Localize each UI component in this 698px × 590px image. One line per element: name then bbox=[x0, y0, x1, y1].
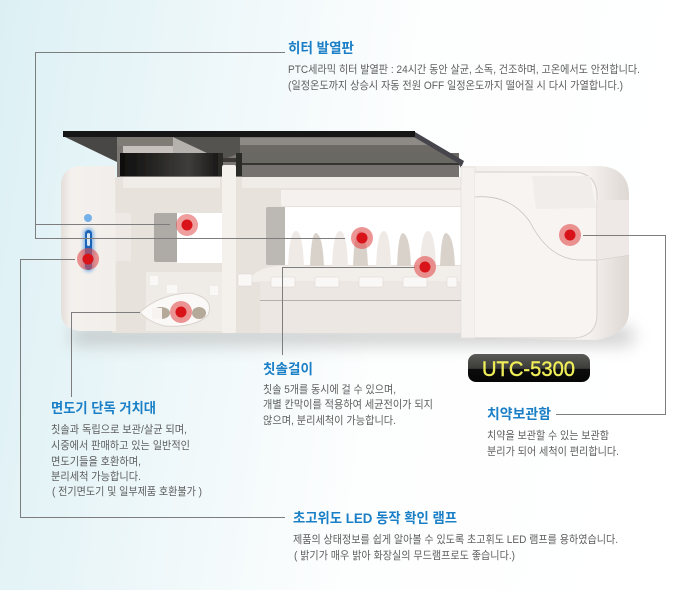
center post bbox=[222, 165, 236, 333]
heater window bbox=[154, 213, 178, 262]
brush hanger window bbox=[266, 207, 286, 265]
device shadow bbox=[70, 326, 635, 346]
callout: heater panel: 히터 발열판 bbox=[288, 40, 354, 56]
callout: toothpaste box bbox=[487, 406, 619, 458]
lid bbox=[63, 131, 464, 178]
callout: toothpaste box: 분리가 되어 세척이 편리합니다. bbox=[487, 445, 619, 458]
callout: LED lamp: ( 밝기가 매우 밝아 화장실의 무드램프로도 좋습니다.) bbox=[294, 549, 515, 562]
callout: razor holder: ( 전기면도기 및 일부제품 호환불가 ) bbox=[52, 484, 202, 498]
callout: toothbrush hanger bbox=[263, 361, 433, 427]
left cap bbox=[61, 166, 116, 331]
callout: razor holder: 시중에서 판매하고 있는 일반적인 bbox=[51, 438, 190, 452]
callout: razor holder bbox=[51, 400, 202, 498]
callout: toothpaste box: 치약보관함 bbox=[487, 406, 551, 422]
callout: toothpaste box: 치약을 보관할 수 있는 보관함 bbox=[487, 428, 609, 442]
callout: LED lamp: 제품의 상태정보를 쉽게 알아볼 수 있도록 초고휘도 LED 램프를 용하였습니다. bbox=[293, 532, 618, 546]
callout: heater panel: (일정온도까지 상승시 자동 전원 OFF 일정온도까지 떨어질 시 다시 가열합니다.) bbox=[288, 78, 623, 92]
callout: LED lamp bbox=[293, 510, 618, 562]
callout: LED lamp: 초고위도 LED 동작 확인 램프 bbox=[293, 510, 457, 526]
callout: razor holder: 분리세척 가능합니다. bbox=[51, 470, 141, 483]
connector: heater panel bbox=[36, 52, 345, 238]
right cap bbox=[461, 166, 629, 340]
hotspot: heater bbox=[176, 214, 198, 236]
LED lamp bbox=[83, 214, 94, 272]
callout: heater panel: PTC세라믹 히터 발열판 : 24시간 동안 살균, 소독, 건조하며, 고온에서도 안전합니다. bbox=[288, 62, 640, 76]
product: toothbrush sterilizer bbox=[61, 131, 635, 346]
callout: razor holder: 칫솔과 독립으로 보관/살균 되며, bbox=[51, 423, 187, 436]
callout: razor holder: 면도기 단독 거치대 bbox=[51, 400, 156, 416]
connector: toothbrush hanger bbox=[282, 268, 415, 355]
hotspot: hanger upper bbox=[351, 227, 373, 249]
model badge: UTC-5300 bbox=[482, 358, 575, 381]
connector: LED lamp bbox=[20, 260, 285, 518]
center body bbox=[112, 177, 464, 333]
callout: toothbrush hanger: 칫솔걸이 bbox=[263, 361, 313, 377]
hotspot: razor holder bbox=[170, 301, 192, 323]
brush hanger fins bbox=[288, 231, 455, 268]
callout: heater panel bbox=[288, 40, 640, 92]
callout: toothbrush hanger: 개별 칸막이를 적용하여 세균전이가 되지 bbox=[263, 397, 433, 411]
hotspot: LED bbox=[77, 248, 99, 270]
callout: razor holder: 면도기들을 호환하며, bbox=[51, 454, 141, 468]
connector: toothpaste box bbox=[556, 236, 666, 414]
hotspot: hanger lower bbox=[414, 256, 436, 278]
callout: toothbrush hanger: 칫솔 5개를 동시에 걸 수 있으며, bbox=[263, 383, 396, 396]
callout: toothbrush hanger: 않으며, 분리세척이 가능합니다. bbox=[263, 414, 396, 427]
connector: razor holder bbox=[72, 312, 140, 397]
hotspot: toothpaste box bbox=[559, 224, 581, 246]
razor holder bbox=[140, 272, 222, 331]
hanger rail bbox=[252, 266, 461, 282]
model badge bbox=[468, 354, 590, 382]
